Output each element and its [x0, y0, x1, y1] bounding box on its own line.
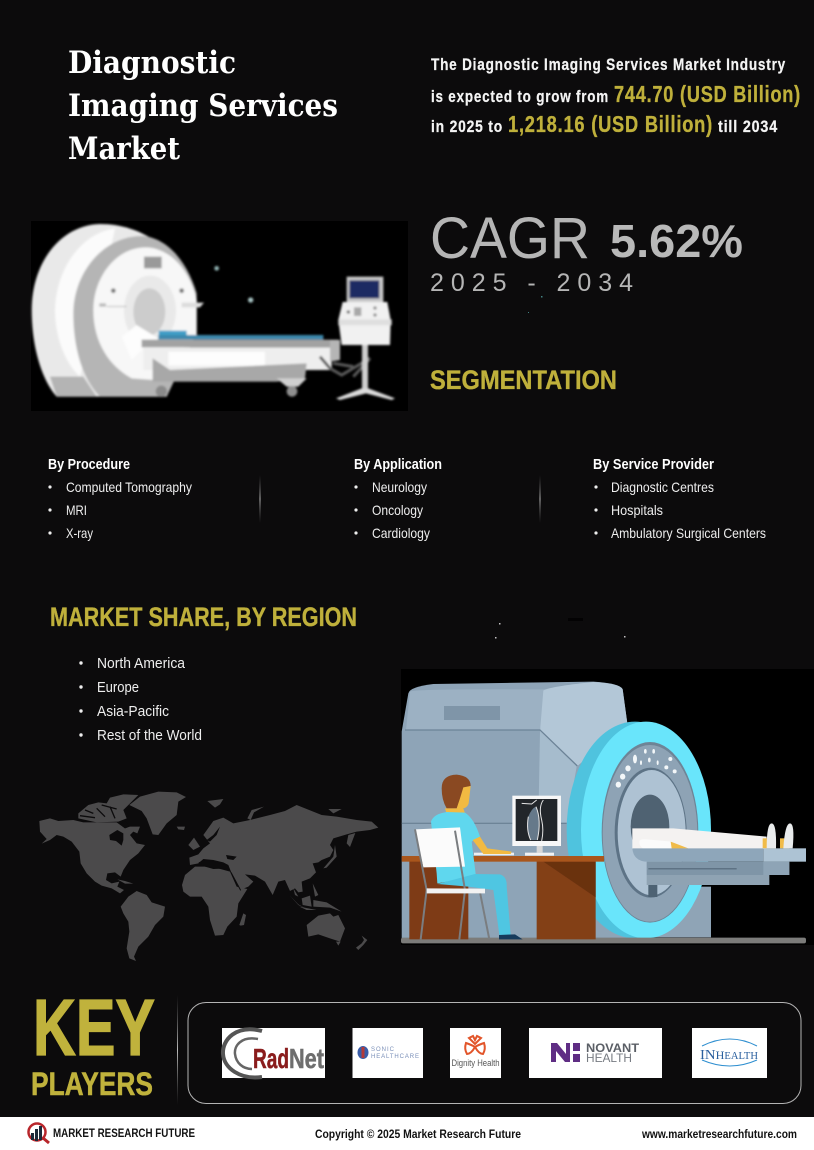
segment column: by procedure: MRI [66, 502, 87, 518]
desk [402, 856, 604, 939]
world map [39, 792, 378, 961]
title: Market [68, 131, 181, 167]
title: Diagnostic [68, 45, 236, 81]
market forecast summary: 1,218.16 (USD Billion) [508, 111, 713, 137]
chair [415, 827, 489, 939]
logo: RadNet [222, 1028, 325, 1078]
footer logo [28, 1124, 195, 1143]
footer logo: MARKET RESEARCH FUTURE [53, 1126, 195, 1140]
title [68, 45, 338, 167]
CAGR figure: CAGR [430, 206, 590, 271]
logo: Dignity Health: Dignity Health [452, 1058, 500, 1068]
logo: Novant Health [529, 1028, 662, 1078]
segment column: by procedure: By Procedure [48, 456, 130, 473]
segment column: by service provider: Ambulatory Surgical Centers [611, 525, 766, 541]
segment column: by procedure [48, 456, 192, 541]
segment column: by application: Oncology [372, 502, 423, 518]
heading: key players [31, 983, 155, 1102]
region list: Asia-Pacific [97, 703, 169, 720]
scanner body [402, 682, 711, 940]
heading: key players: KEY [33, 983, 155, 1072]
region list: North America [97, 655, 186, 672]
patient table [632, 823, 806, 897]
footer [0, 1117, 814, 1150]
logo: Sonic Healthcare [352, 1028, 423, 1078]
monitor [474, 796, 561, 856]
CAGR figure: 2025 - 2034 [430, 269, 633, 297]
segment column: by service provider: Hospitals [611, 502, 663, 518]
market forecast summary: in 2025 to [431, 117, 503, 136]
heading: segmentation: SEGMENTATION [430, 365, 617, 395]
logo: Novant Health: NOVANT [586, 1041, 640, 1055]
technician [431, 775, 523, 939]
illustration: MRI scanner with control console [31, 221, 408, 411]
logo: Novant Health: HEALTH [586, 1051, 632, 1065]
CAGR figure [430, 206, 743, 297]
heading: key players: PLAYERS [31, 1066, 153, 1102]
logo: InHealth [692, 1028, 767, 1078]
illustration: technician operating MRI scanner [401, 669, 814, 945]
region list: Europe [97, 679, 139, 696]
region list: Rest of the World [97, 727, 202, 744]
segment column: by service provider [593, 456, 766, 541]
logo: Dignity Health [450, 1028, 501, 1078]
title: Imaging Services [68, 88, 338, 124]
footer: Copyright © 2025 Market Research Future [315, 1127, 521, 1141]
scanner ring [567, 722, 711, 938]
logo: Sonic Healthcare: SONIC [371, 1047, 395, 1053]
segment column: by application: Cardiology [372, 525, 430, 541]
region list [79, 655, 202, 744]
market forecast summary: till 2034 [718, 117, 778, 136]
market forecast summary [431, 55, 801, 137]
segment column: by application: Neurology [372, 479, 427, 495]
market forecast summary: is expected to grow from [431, 87, 609, 106]
CAGR figure: 5.62% [610, 215, 743, 267]
segment column: by application: By Application [354, 456, 442, 473]
segment column: by service provider: Diagnostic Centres [611, 479, 714, 495]
logo: RadNet: Rad [253, 1043, 289, 1074]
segment column: by procedure: Computed Tomography [66, 479, 192, 495]
heading: market share by region: MARKET SHARE, BY REGION [50, 602, 357, 632]
logo: InHealth: INHEALTH [700, 1048, 758, 1063]
logo: RadNet: Net [289, 1043, 324, 1074]
segment column: by application [354, 456, 442, 541]
floor bar [401, 938, 806, 943]
small specks [495, 296, 626, 638]
segment column: by procedure: X-ray [66, 525, 93, 541]
key players panel [188, 1002, 801, 1104]
logo: Sonic Healthcare: HEALTHCARE [371, 1054, 419, 1060]
segment column: by service provider: By Service Provider [593, 456, 714, 473]
